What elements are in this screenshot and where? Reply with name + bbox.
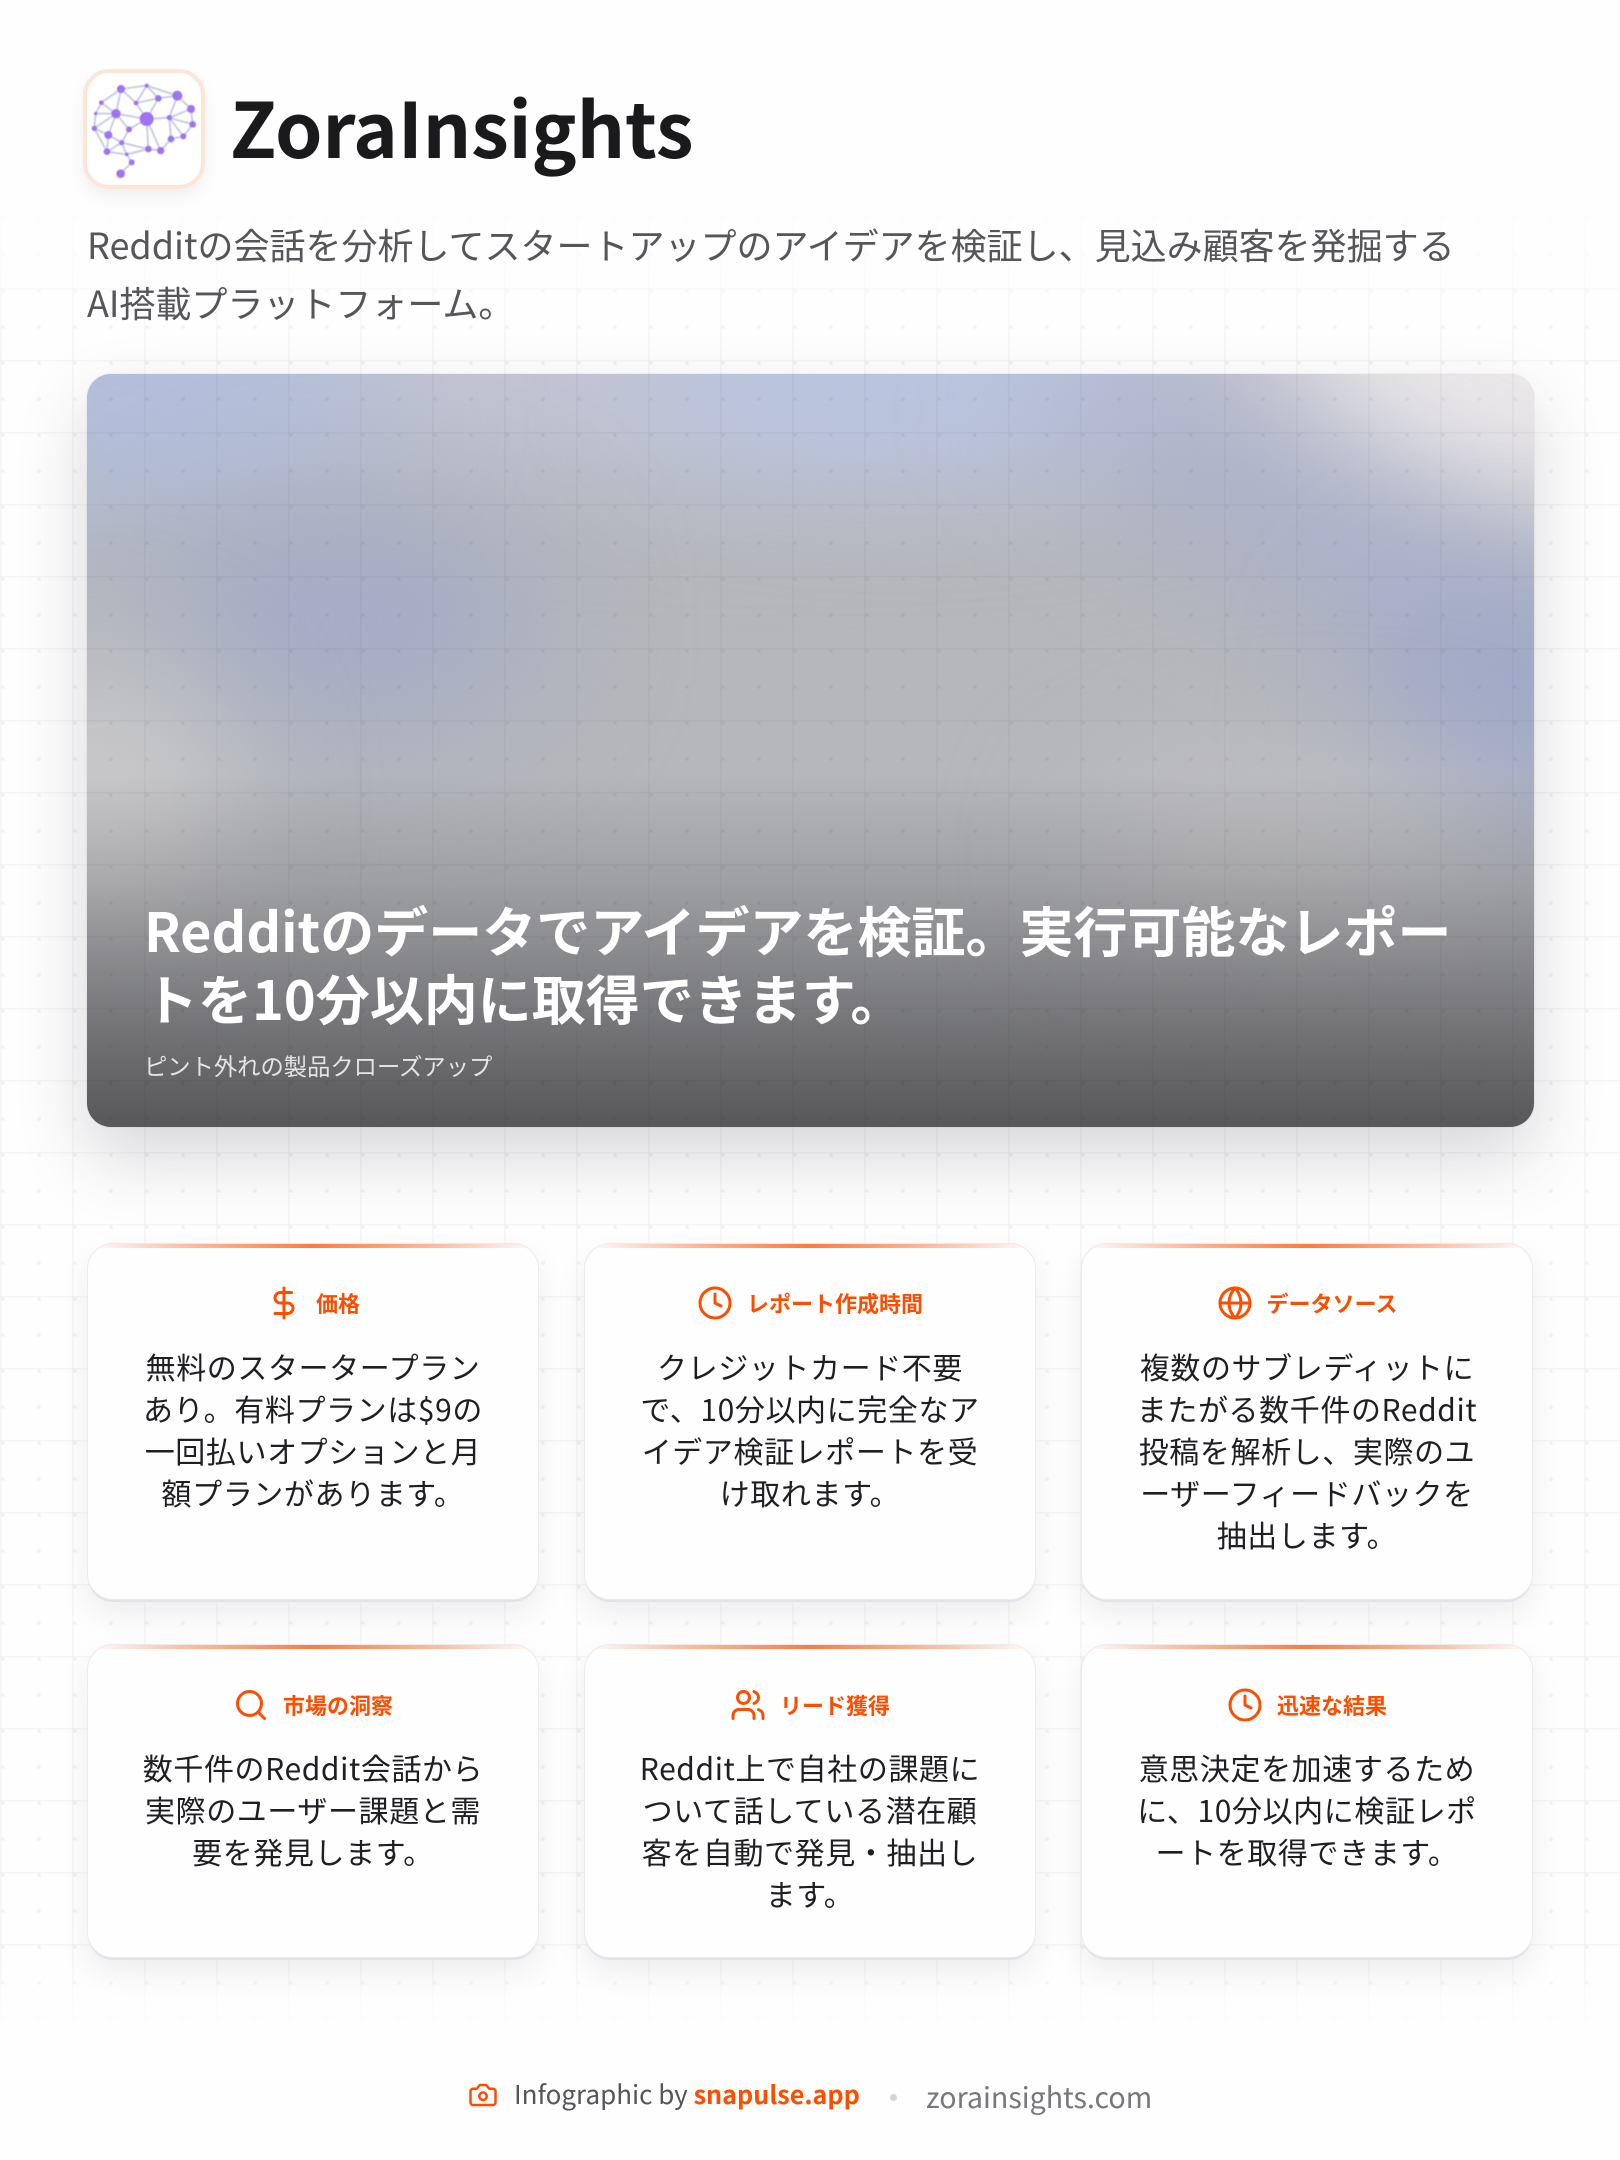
card heading: report time: レポート作成時間: [747, 1287, 923, 1319]
footer separator dot: [890, 2094, 897, 2101]
card text: data source: 複数のサブレディットに: [1140, 1344, 1474, 1388]
card text: quick results: ートを取得できます。: [1156, 1829, 1458, 1873]
card text: quick results: 意思決定を加速するため: [1139, 1745, 1475, 1789]
card heading: lead acquisition: リード獲得: [780, 1689, 890, 1721]
logo: brain network icon: [83, 69, 205, 189]
card text: pricing: 額プランがあります。: [162, 1470, 464, 1514]
footer website: zorainsights.com: [926, 2076, 1152, 2117]
card text: data source: またがる数千件のReddit: [1137, 1386, 1477, 1430]
feature card: report time: [584, 1243, 1036, 1600]
card text: data source: [1137, 1344, 1477, 1556]
subtitle: [87, 218, 1455, 328]
card heading: data source: [1218, 1286, 1397, 1320]
card text: pricing: 一回払いオプションと月: [145, 1428, 481, 1472]
card heading: quick results: 迅速な結果: [1277, 1689, 1387, 1721]
hero image panel: [87, 374, 1534, 1127]
feature card: market insight: [87, 1644, 539, 1958]
card text: lead acquisition: 客を自動で発見・抽出し: [642, 1829, 978, 1873]
card text: market insight: 実際のユーザー課題と需: [145, 1787, 481, 1831]
card text: lead acquisition: [640, 1745, 980, 1915]
feature card: lead acquisition: [584, 1644, 1036, 1958]
card heading: quick results: [1228, 1688, 1387, 1722]
card text: report time: イデア検証レポートを受: [642, 1428, 978, 1472]
dark gradient overlay: [87, 374, 1534, 1127]
card text: report time: [640, 1344, 980, 1514]
card text: data source: ーザーフィードバックを: [1140, 1470, 1474, 1514]
hero caption: ピント外れの製品クローズアップ: [144, 1048, 492, 1082]
footer: [469, 2075, 1152, 2117]
card text: report time: で、10分以内に完全なア: [640, 1386, 980, 1430]
card text: report time: け取れます。: [720, 1470, 900, 1514]
hero headline: [144, 889, 1452, 1036]
card heading: market insight: 市場の洞察: [283, 1689, 393, 1721]
card text: market insight: 数千件のReddit会話から: [143, 1745, 483, 1789]
card text: lead acquisition: ます。: [766, 1871, 854, 1915]
blurred product photo: [87, 374, 1534, 1127]
card text: quick results: [1137, 1745, 1477, 1873]
card text: pricing: あり。有料プランは$9の: [143, 1386, 483, 1430]
card text: lead acquisition: Reddit上で自社の課題に: [640, 1745, 980, 1789]
subtitle: Redditの会話を分析してスタートアップのアイデアを検証し、見込み顧客を発掘する: [87, 218, 1455, 270]
hero headline: Redditのデータでアイデアを検証。実行可能なレポー: [144, 889, 1452, 968]
hero text: [144, 889, 1452, 1082]
card text: data source: 抽出します。: [1217, 1512, 1397, 1556]
feature card: pricing: [87, 1243, 539, 1600]
hero headline: トを10分以内に取得できます。: [144, 956, 904, 1036]
card heading: pricing: 価格: [316, 1287, 360, 1319]
title: ZoraInsights: [230, 70, 693, 180]
footer credit: Infographic by snapulse.app: [514, 2075, 860, 2112]
feature card: quick results: [1081, 1644, 1533, 1958]
card heading: data source: データソース: [1267, 1287, 1397, 1319]
background grid pattern: [0, 288, 1589, 1984]
card text: market insight: 要を発見します。: [192, 1829, 434, 1873]
card text: report time: クレジットカード不要: [657, 1344, 963, 1388]
card text: pricing: 無料のスタータープラン: [146, 1344, 480, 1388]
card heading: pricing: [274, 1286, 360, 1320]
card text: quick results: に、10分以内に検証レポ: [1137, 1787, 1477, 1831]
card heading: lead acquisition: [732, 1689, 890, 1721]
card text: lead acquisition: ついて話している潜在顧: [643, 1787, 977, 1831]
feature card: data source: [1081, 1243, 1533, 1600]
subtitle: AI搭載プラットフォーム。: [87, 276, 514, 328]
card text: pricing: [143, 1344, 483, 1514]
card text: market insight: [143, 1745, 483, 1873]
icon: camera: [469, 2084, 497, 2106]
card text: data source: 投稿を解析し、実際のユ: [1139, 1428, 1475, 1472]
